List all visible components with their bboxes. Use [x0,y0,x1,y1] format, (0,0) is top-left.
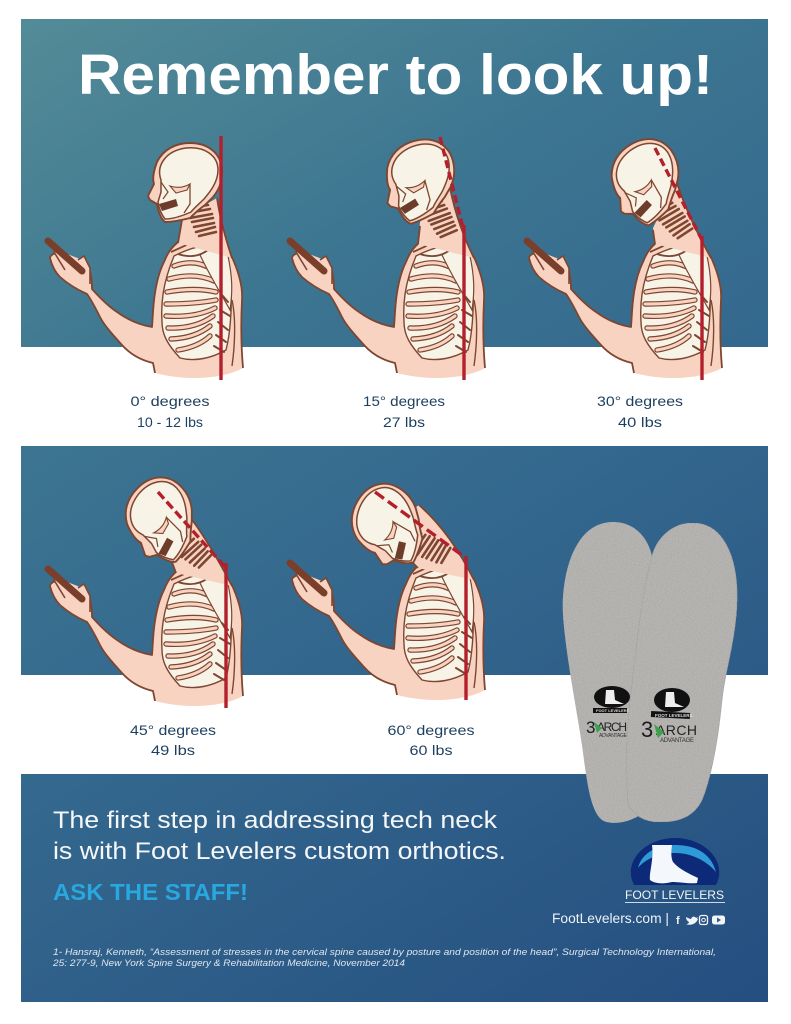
figure: 15 degrees posture [290,133,485,380]
call to action text: The first step in addressing tech neck [53,807,498,834]
insole: left [563,522,660,823]
label: 60 degrees [388,722,474,758]
label: 15 degrees [363,393,445,430]
footnote citation: 1- Hansraj, Kenneth, “Assessment of stresses in the cervical spine caused by posture and position of the head”, Surgical Technology International, [53,947,716,958]
call to action text: is with Foot Levelers custom orthotics. [53,838,506,865]
call to action text [53,807,506,865]
figure: 30 degrees posture [527,128,722,380]
social icons [676,915,725,927]
label: 30 degrees: 30° degrees [597,393,683,409]
logo on left insole: 3 [586,718,595,737]
title: Remember to look up! [78,43,713,107]
ask the staff: ASK THE STAFF! [53,879,248,905]
logo on left insole: ARCH [597,720,627,734]
figure: 60 degrees posture [290,473,485,700]
figure: 0 degrees posture [48,136,243,380]
label: 45 degrees: 45° degrees [130,722,216,738]
label: 60 degrees: 60° degrees [388,722,474,738]
label: 0 degrees: 0° degrees [130,393,210,409]
panel: gradient top [21,19,768,347]
footnote citation [52,947,716,969]
social icons: f [676,915,680,927]
logo on left insole: ADVANTAGE [599,733,628,739]
logo on right insole: ARCH [656,722,697,738]
footnote citation: 25: 277-9, New York Spine Surgery & Rehabilitation Medicine, November 2014 [52,958,405,969]
logo on left insole [586,686,630,739]
panel: gradient middle [21,446,768,675]
insoles [563,522,737,823]
logo: Foot Levelers: FOOT LEVELERS [625,888,724,902]
label: 15 degrees: 27 lbs [383,414,425,430]
label: 60 degrees: 60 lbs [410,742,452,758]
label: 0 degrees: 10 - 12 lbs [137,414,203,430]
label: 45 degrees [130,722,216,758]
foot [650,845,698,883]
label: 45 degrees: 49 lbs [151,742,195,758]
label: 0 degrees [130,393,210,430]
panel: gradient bottom [21,774,768,1002]
logo on right insole: 3 [641,717,653,742]
logo on right insole [641,688,697,744]
insole: right [627,523,737,822]
label: 15 degrees: 15° degrees [363,393,445,409]
label: 30 degrees: 40 lbs [618,414,662,430]
logo on right insole: FOOT LEVELERS [655,713,693,718]
logo oval [631,838,719,885]
website line: FootLevelers.com | [552,911,669,926]
logo on right insole: ADVANTAGE [660,738,694,744]
logo: Foot Levelers [625,838,725,903]
label: 30 degrees [597,393,683,430]
logo on left insole: FOOT LEVELERS [596,708,630,713]
figure: 45 degrees posture [48,466,243,708]
